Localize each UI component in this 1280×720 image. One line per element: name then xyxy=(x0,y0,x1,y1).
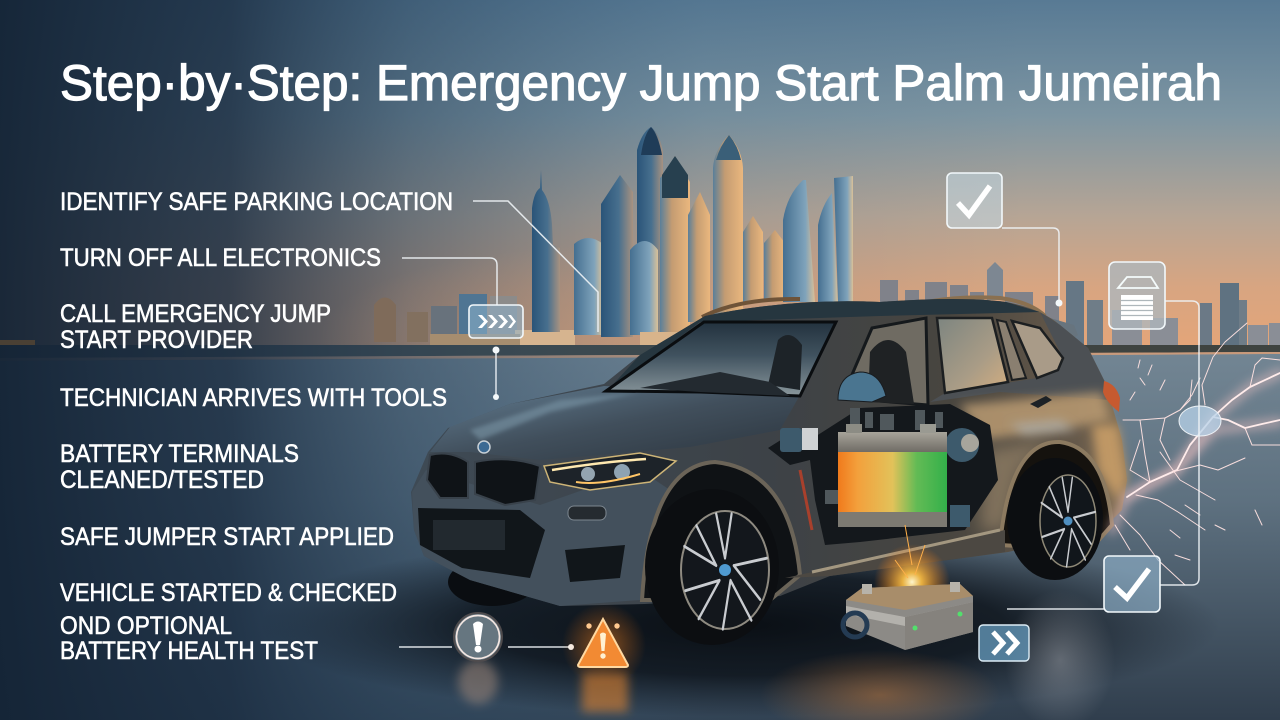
distant skyline left xyxy=(0,294,575,348)
driver seat xyxy=(868,340,914,404)
rear spoiler and roof rails xyxy=(702,297,1078,342)
icon: double chevron badge xyxy=(979,625,1029,661)
step 8: BATTERY HEALTH TEST xyxy=(60,637,318,665)
icon: exclamation circle xyxy=(454,613,502,704)
headlight xyxy=(544,453,676,490)
door sky highlight xyxy=(1010,420,1076,436)
car body shell xyxy=(411,299,1127,606)
sparks from jump box xyxy=(874,525,950,620)
front wheel xyxy=(645,489,779,645)
step list xyxy=(60,188,453,665)
door reflection xyxy=(960,392,1110,440)
connector dots xyxy=(492,300,1062,650)
icon: warning triangle xyxy=(562,603,646,712)
car ground shadow xyxy=(260,533,1220,720)
hood highlight xyxy=(470,392,640,440)
step 4: TECHNICIAN ARRIVES WITH TOOLS xyxy=(60,384,447,412)
icon: chevrons badge xyxy=(469,305,523,338)
glowing orb xyxy=(1179,406,1221,436)
step 5 xyxy=(60,440,299,494)
wing mirror xyxy=(838,372,886,402)
step 3 xyxy=(60,300,331,354)
kidney grilles xyxy=(427,454,540,505)
title: Step·by·Step: Emergency Jump Start Palm Jumeirah xyxy=(60,55,1222,111)
badge xyxy=(478,441,490,453)
lightning discharge xyxy=(1112,323,1280,585)
step 3: START PROVIDER xyxy=(60,326,253,354)
lower door reflection xyxy=(980,440,1050,530)
left dark vignette over water xyxy=(0,345,1280,720)
step 3: CALL EMERGENCY JUMP xyxy=(60,300,331,328)
car xyxy=(411,297,1127,645)
sea and ground xyxy=(0,354,1280,720)
step 5: CLEANED/TESTED xyxy=(60,466,264,494)
step 1: IDENTIFY SAFE PARKING LOCATION xyxy=(60,188,453,216)
tail light xyxy=(1103,381,1120,412)
sill xyxy=(785,530,1005,578)
step 6: SAFE JUMPER START APPLIED xyxy=(60,523,394,551)
step 8 xyxy=(60,612,318,665)
windshield xyxy=(606,322,836,396)
roof top xyxy=(608,299,1040,390)
shoreline xyxy=(0,345,1280,361)
front door window xyxy=(842,318,928,405)
front bumper xyxy=(412,470,670,606)
rear pillar dark panel xyxy=(930,312,1110,402)
step 2: TURN OFF ALL ELECTRONICS xyxy=(60,244,381,272)
step 7: VEHICLE STARTED & CHECKED xyxy=(60,579,397,607)
narrow rear pillar window xyxy=(997,320,1026,380)
step 8: OND OPTIONAL xyxy=(60,612,232,640)
rear wheel arch xyxy=(1000,442,1112,550)
step 5: BATTERY TERMINALS xyxy=(60,440,299,468)
front wheel arch xyxy=(642,462,800,600)
portable jump starter box xyxy=(843,582,973,650)
rear quarter window xyxy=(1012,321,1063,378)
connector lines xyxy=(399,201,1199,647)
door handle xyxy=(1030,396,1052,408)
main downtown towers xyxy=(532,127,853,346)
battery cutaway xyxy=(838,424,947,527)
hood xyxy=(430,386,800,460)
rear door window xyxy=(937,318,1008,393)
far front wheel xyxy=(448,558,536,606)
icon: battery stack badge xyxy=(1109,262,1165,329)
dashboard xyxy=(640,372,790,396)
rear fender reflection xyxy=(1092,425,1127,500)
icon: check badge lower xyxy=(1104,556,1160,612)
icon: check badge top xyxy=(947,173,1002,228)
lower air intake xyxy=(418,506,625,582)
rear wheel xyxy=(1007,458,1103,580)
distant skyline right xyxy=(880,262,1280,346)
engine bay cutaway xyxy=(768,404,998,545)
front seat in windshield xyxy=(768,335,802,390)
